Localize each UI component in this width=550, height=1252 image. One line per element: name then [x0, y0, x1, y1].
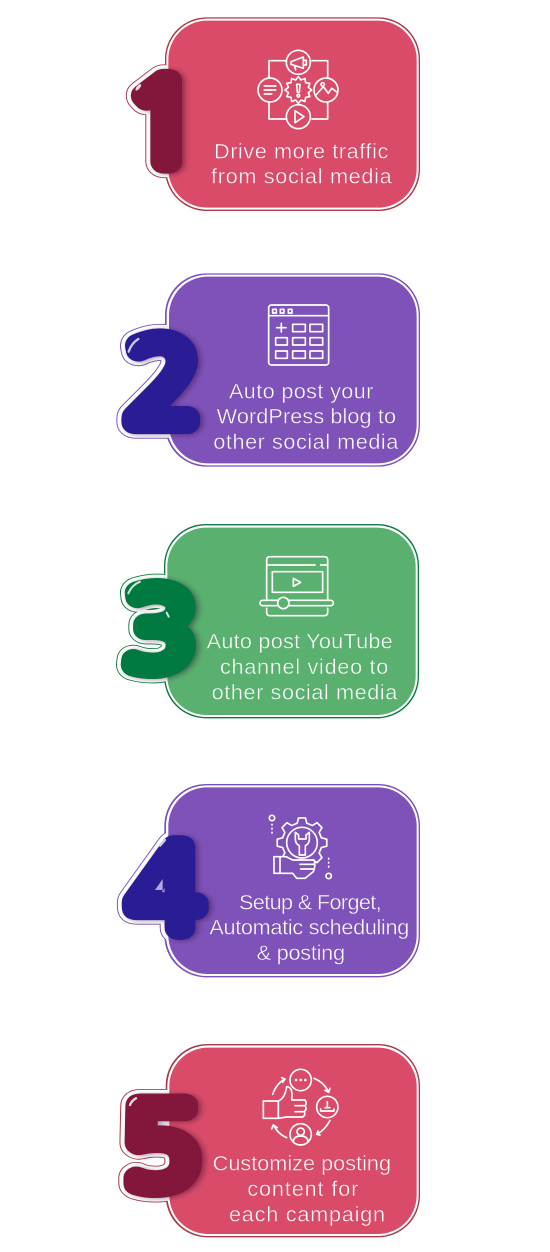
panel: step 1 [125, 17, 420, 211]
panel: step 2: 2 [125, 327, 200, 439]
numeral 5: 5 [123, 1093, 200, 1203]
numeral counter [155, 879, 163, 890]
caption 5: content for [247, 1176, 358, 1201]
caption 1: from social media [211, 163, 393, 188]
panel: step 3 [124, 524, 419, 718]
numeral 2: 2 [125, 327, 200, 439]
caption 4: Automatic scheduling [209, 914, 409, 939]
caption 1 [211, 138, 393, 188]
icon: social media hub [258, 50, 338, 129]
icon: thumbs up engagement cycle [263, 1069, 338, 1145]
numeral highlight [130, 1098, 136, 1105]
icon: video player [260, 557, 333, 616]
panel: step 2: 2 [125, 327, 200, 439]
panel: step 3: 3 [124, 578, 195, 684]
caption 5: Customize posting [213, 1151, 391, 1176]
caption 5: each campaign [229, 1202, 385, 1227]
panel: step 3: 3 [124, 578, 195, 684]
caption 3 [207, 628, 398, 704]
numeral 3: 3 [124, 578, 195, 684]
panel: step 5: 5 [123, 1093, 200, 1203]
numeral 1: 1 [125, 66, 200, 178]
numeral highlight [128, 582, 169, 617]
panel: step 2 [125, 273, 420, 467]
panel: step 4: 4 [129, 833, 201, 945]
caption 3: Auto post YouTube [207, 628, 393, 653]
caption 1: Drive more traffic [214, 138, 389, 163]
caption 2 [213, 378, 399, 454]
caption 3: channel video to [220, 654, 388, 679]
caption 2: WordPress blog to [217, 403, 396, 428]
panel: step 1: 1 [125, 66, 200, 178]
panel: step 1: 1 [125, 66, 200, 178]
panel: step 5: 5 [123, 1093, 200, 1203]
caption 2: other social media [213, 429, 399, 454]
caption 4: Setup & Forget, [239, 889, 382, 914]
caption 4: & posting [257, 940, 345, 965]
icon: post scheduling table [269, 305, 329, 365]
numeral 4: 4 [129, 833, 201, 945]
numeral highlight [134, 83, 142, 91]
caption 5 [213, 1151, 391, 1227]
caption 4 [209, 889, 409, 965]
icon: wrench in gear with hand [269, 815, 331, 879]
numeral highlight [160, 840, 165, 846]
caption 2: Auto post your [229, 378, 373, 403]
panel: step 5 [123, 1044, 420, 1237]
numeral highlight [129, 339, 138, 352]
panel: step 4: 4 [129, 833, 201, 945]
caption 3: other social media [212, 679, 398, 704]
panel: step 4 [129, 784, 420, 977]
